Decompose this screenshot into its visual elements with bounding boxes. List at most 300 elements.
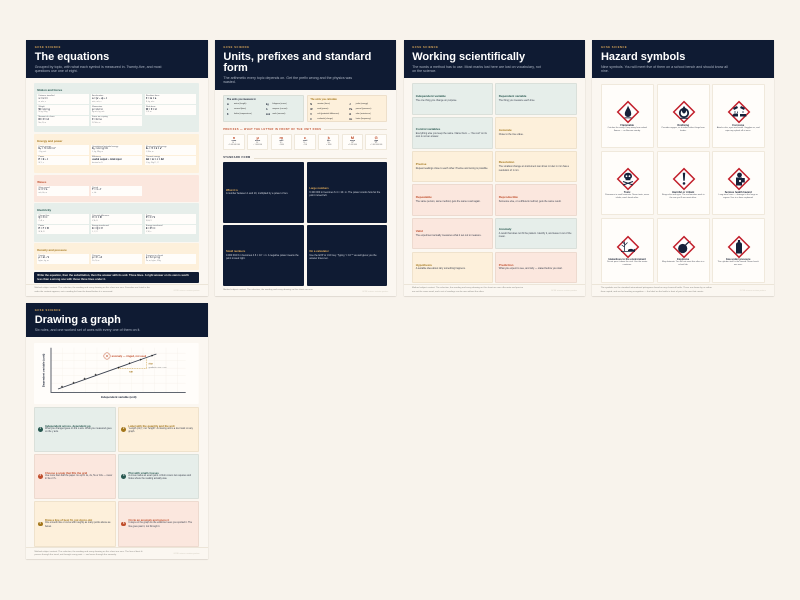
- panel: motion and forces: kg m/s, kg, m/s: [92, 111, 104, 113]
- panel: the units you measure in: mol: [266, 112, 270, 116]
- header: hazard symbols: nine.: [601, 69, 609, 73]
- x axis label: Independent variable (unit): [101, 395, 137, 399]
- panel: waves: Wave speed: [38, 187, 50, 189]
- header: working scientifically: GCSE SCIENCE: [412, 46, 438, 49]
- panel: electricity: E = P × t: [146, 227, 155, 230]
- panel: energy and power: useful output ÷ total input: [92, 158, 122, 161]
- panel: the units you measure in: [223, 95, 304, 122]
- panel: the units you measure in: kelvin (temperature): [234, 112, 252, 114]
- poster: units, prefixes and standard form: [215, 40, 396, 296]
- panel: motion and forces: s = v × t: [38, 97, 47, 100]
- rule 4: 4: [123, 474, 124, 477]
- prefix cards: ÷ 1000: [279, 144, 284, 146]
- panel: waves: Period: [92, 187, 98, 189]
- card: anomaly: Anomaly: [499, 227, 511, 231]
- card: what it is: A number between 1 and 10, multiplied by a power of ten.: [226, 192, 288, 195]
- panel: the units you calculate: W: [310, 108, 313, 110]
- panel: electricity: C, A, s: [38, 220, 44, 222]
- rule 3: [34, 454, 116, 499]
- panel: energy and power: Eₑ = ½ × k × e²: [146, 147, 162, 150]
- hazard card: oxidising: [657, 84, 710, 148]
- panel: the units you calculate: The units you calculate: [310, 98, 337, 101]
- prefix cards: ÷ 1 000 000: [253, 144, 262, 146]
- gradient labels: rise: [149, 363, 154, 366]
- rule 2: “Length (cm)”, not “length”. A missing unit is a lost mark on any graph.: [128, 428, 193, 433]
- prefix cards: giga: [374, 140, 378, 142]
- panel: electricity: Power: [146, 215, 152, 217]
- panel: energy and power: Thermal energy: [146, 156, 160, 158]
- panel: the units you measure in: metre (length): [234, 102, 246, 104]
- footer note: [404, 284, 585, 294]
- y axis label: Dependent variable (unit): [42, 354, 46, 387]
- hazard card: hazardous to the environment: Hazardous to the environment: [609, 258, 646, 261]
- header: hazard symbols: Hazard symbols: [601, 51, 685, 63]
- panel: motion and forces: F = m × a: [146, 97, 156, 100]
- rule 5: [34, 501, 116, 547]
- prefix cards: 10⁻³: [280, 142, 283, 144]
- panel: the units you calculate: hertz (frequency): [356, 118, 371, 120]
- panel: motion and forces: M = F × d: [38, 118, 49, 121]
- panel: energy and power: J, kg, N/kg, m: [92, 151, 103, 153]
- header: units: Units, prefixes and standard: [223, 51, 371, 63]
- chart: worked graph: [34, 343, 198, 404]
- panel: electricity: P = I² × R: [38, 227, 49, 230]
- card: anomaly: A result that does not fit the pattern. Identify it, and leave it out of the mean.: [499, 232, 571, 238]
- panel: electricity: V = I × R: [92, 216, 102, 219]
- poster: hazard symbols: [592, 40, 774, 296]
- hazard card: corrosive: [712, 84, 765, 148]
- card: hypothesis: [412, 252, 493, 283]
- card: on a calculator: On a calculator: [309, 250, 329, 253]
- panel: the units you measure in: K: [227, 112, 229, 116]
- prefix cards: × 1 000 000: [348, 144, 357, 146]
- panel: the units you measure in: mole (amount): [272, 112, 285, 114]
- panel: density and pressure: ρ = m ÷ V: [38, 256, 49, 259]
- panel: density and pressure: [34, 243, 199, 270]
- card: hypothesis: A testable idea about why something happens.: [416, 267, 466, 270]
- panel: motion and forces: N, kg, m/s²: [146, 101, 155, 103]
- hazard card: serious health hazard: Long-term harm — damage to the lungs or organs. Use in a fume cupboard.: [719, 194, 758, 199]
- card: accurate: Accurate: [499, 128, 512, 132]
- rule 1: What you changed goes on the x axis. What you measured goes on the y axis.: [45, 428, 112, 433]
- card: dependent variable: [495, 83, 577, 115]
- footer note: [26, 547, 208, 557]
- panel: waves: Waves: [37, 180, 46, 184]
- panel: the units you calculate: joule (energy): [356, 102, 368, 104]
- panel: electricity: [34, 203, 199, 242]
- card: control variables: Everything else you keep the same. Name them — “the rest” on its own is not an answer.: [416, 132, 487, 138]
- header: the equations: GCSE SCIENCE: [35, 46, 61, 49]
- panel: motion and forces: W = F × d: [146, 108, 156, 111]
- prefix cards: 10⁻²: [303, 142, 307, 144]
- panel: the units you calculate: ohm (resistance): [356, 112, 371, 114]
- panel: electricity: E = Q × V: [92, 227, 103, 230]
- panel: motion and forces: Motion and forces: [37, 88, 62, 92]
- rule 2: [118, 407, 199, 452]
- panel: the units you calculate: Hz: [349, 118, 352, 120]
- panel: energy and power: J, kg, m/s: [38, 151, 46, 153]
- card: resolution: Resolution: [499, 160, 514, 164]
- hazard card: gas under pressure: The cylinder itself is the hazard. Never knock one over.: [718, 261, 759, 266]
- hazard card: explosive: May detonate. You will not meet this often in a school lab.: [662, 261, 704, 266]
- hazard card: corrosive: Attacks skin, eyes and metal. Goggles on, and wipe any splash off at once.: [717, 127, 760, 132]
- rule 1: [34, 407, 116, 452]
- panel: motion and forces: Weight: [38, 106, 45, 108]
- card: reproducible: Someone else, or a different method, gets the same result.: [499, 200, 561, 203]
- panel: motion and forces: Moment of a force: [38, 116, 55, 118]
- prefix cards: ÷ 100: [303, 144, 307, 146]
- gradient labels: run: [129, 371, 134, 374]
- header: working scientifically: on the science.: [412, 69, 436, 73]
- footer note: GCSE science revision posters: [173, 553, 200, 555]
- panel: the units you calculate: C: [310, 118, 312, 120]
- panel: electricity: Potential difference: [92, 215, 109, 217]
- panel: motion and forces: Distance travelled: [38, 95, 54, 97]
- panel: the units you measure in: s: [227, 108, 228, 110]
- prefix cards: micro: [255, 140, 260, 142]
- poster: the equations: [26, 40, 208, 296]
- header: drawing a graph: Six rules, and one worked set of axes with every one of them on it.: [35, 328, 140, 332]
- panel: motion and forces: Nm, N, m: [38, 122, 46, 124]
- card: valid: Valid: [416, 229, 423, 233]
- card: large numbers: 6 400 000 m becomes 6.4 × 10⁶ m. The power counts how far the point moved left.: [309, 191, 380, 197]
- rule 5: 5: [40, 522, 41, 525]
- panel: waves: m/s, Hz, m: [38, 192, 47, 194]
- hazard card: flammable: [601, 84, 654, 148]
- card: on a calculator: [307, 225, 387, 286]
- panel: motion and forces: [34, 83, 199, 132]
- panel: energy and power: Efficiency: [92, 156, 101, 158]
- prefix cards: 10⁻⁶: [256, 142, 259, 144]
- hazard card: flammable: Flammable: [620, 124, 634, 127]
- header: the equations: [26, 40, 208, 78]
- card: small numbers: Small numbers: [226, 250, 245, 253]
- card: large numbers: [307, 162, 387, 223]
- gradient labels: [129, 363, 167, 374]
- panel: density and pressure: Pa, N, m²: [92, 260, 100, 262]
- card: accurate: Close to the true value.: [499, 133, 524, 136]
- panel: density and pressure: Density: [38, 255, 45, 257]
- footer note: GCSE science revision posters: [173, 290, 200, 292]
- panel: energy and power: decimal or %: [92, 162, 103, 164]
- callout: write the equation: [34, 272, 199, 283]
- hazard card: harmful or irritant: Harmful or irritant: [672, 191, 694, 194]
- prefix cards: × 1000: [326, 144, 331, 146]
- hazard card: explosive: Explosive: [677, 258, 689, 261]
- header: units: form: [223, 62, 248, 74]
- footer note: GCSE science revision posters: [362, 291, 388, 293]
- prefix cards: 10⁻⁹: [232, 142, 236, 144]
- prefix cards: [223, 134, 387, 150]
- card: reproducible: Reproducible: [499, 195, 518, 199]
- card: reproducible: [495, 184, 577, 216]
- hazard card: serious health hazard: Serious health hazard: [725, 191, 752, 194]
- panel: waves: v = f × λ: [38, 188, 47, 191]
- rule 2: 2: [123, 427, 124, 430]
- header: hazard symbols: Nine symbols. You will meet five of them on a school bench and should know all: [601, 64, 728, 68]
- anomaly marker: anomaly — ringed, not used: [112, 354, 147, 358]
- panel: density and pressure: Density and pressure: [37, 248, 67, 252]
- panel: electricity: W, A, V: [146, 220, 152, 222]
- card: on a calculator: Use the EXP or ×10ˣ key. Typing “× 10 ^” as well gives you the answer times ten.: [309, 254, 377, 260]
- prefix cards: m: [280, 135, 283, 140]
- panel: the units you calculate: Ω: [349, 112, 351, 116]
- prefix cards: k: [328, 135, 330, 140]
- callout: write the equation: Write the equation, then the substitution, then the answer with its unit. Three lines. A right answer on its own is worth: [37, 274, 189, 277]
- rule 2: Label with the quantity and the unit: [128, 425, 175, 428]
- card: prediction: What you expect to see, and why — stated before you start.: [499, 267, 563, 270]
- panel: waves: s, Hz: [92, 192, 96, 194]
- rule 6: [118, 501, 199, 547]
- card: dependent variable: The thing you measure each time.: [499, 99, 535, 102]
- rule 5: Draw a line of best fit, not dot-to-dot: [45, 519, 92, 522]
- prefix cards: G: [375, 135, 378, 140]
- hazard card: harmful or irritant: [657, 151, 710, 215]
- footer note: Method subject content. The selection, the wording and every drawing on this sheet are ours. The line of best fit: [34, 551, 142, 553]
- prefix cards: × 1 000 000 000: [370, 144, 382, 146]
- panel: energy and power: Eₖ = ½ × m × v²: [38, 147, 56, 150]
- card: control variables: Control variables: [416, 127, 440, 131]
- card: repeatable: [412, 184, 493, 216]
- panel: energy and power: W, J, s: [38, 162, 44, 164]
- rule 4: Plot with small crosses: [128, 472, 159, 475]
- panel: energy and power: Energy and power: [37, 139, 62, 143]
- prefix cards: µ: [256, 135, 259, 140]
- prefix cards: centi: [303, 140, 307, 142]
- panel: motion and forces: W = m × g: [38, 108, 50, 111]
- hazard card: explosive: [657, 218, 710, 283]
- panel: the units you measure in: kg: [266, 102, 269, 106]
- card: large numbers: Large numbers: [309, 187, 329, 190]
- header: working scientifically: The words a method has to use. Most marks lost here are lost on vocabulary, not: [412, 64, 541, 68]
- panel: the units you calculate: Pa: [349, 108, 352, 110]
- panel: electricity: Energy transferred: [146, 225, 162, 227]
- hazard card: gas under pressure: [712, 218, 765, 283]
- panel: electricity: Energy transferred: [92, 225, 109, 227]
- card: prediction: [495, 252, 577, 283]
- prefix cards: mega: [350, 140, 355, 142]
- card: prediction: Prediction: [499, 263, 513, 267]
- panel: motion and forces: Force on a spring: [92, 116, 108, 118]
- panel: the units you measure in: kilogram (mass): [272, 102, 287, 104]
- rule 3: 3: [40, 474, 41, 477]
- header: the equations: questions use one of eight.: [35, 69, 78, 73]
- rule 4: [118, 454, 199, 499]
- footer note: GCSE science revision posters: [551, 290, 577, 292]
- card: hypothesis: Hypothesis: [416, 263, 432, 267]
- prefix cards: 10⁹: [375, 142, 377, 144]
- panel: energy and power: Eₚ = m × g × h: [92, 147, 108, 150]
- footer note: GCSE science revision posters: [740, 290, 766, 292]
- panel: density and pressure: Pressure: [92, 255, 100, 257]
- panel: waves: T = 1 ÷ f: [92, 188, 101, 191]
- card: precise: Repeat readings close to each other. Precise and wrong is possible.: [416, 167, 488, 170]
- rule 6: Circle an anomaly and ignore it: [128, 519, 169, 522]
- prefix cards: c: [304, 135, 306, 140]
- card: dependent variable: Dependent variable: [499, 94, 526, 98]
- callout: write the equation: less than a wrong one with those three lines under it.: [37, 278, 106, 281]
- panel: motion and forces: Resultant force: [146, 95, 159, 97]
- heading: prefixes: PREFIXES — WHAT THE LETTER IN FRONT OF THE UNIT DOES: [223, 128, 321, 130]
- header: drawing a graph: GCSE SCIENCE: [35, 309, 61, 312]
- panel: density and pressure: Pa, m, kg/m³, N/kg: [146, 260, 161, 262]
- panel: the units you measure in: m: [227, 102, 229, 106]
- heading: standard form: STANDARD FORM: [223, 156, 251, 159]
- rule 3: Choose a scale that fills the grid: [45, 472, 87, 475]
- prefix cards: milli: [279, 140, 283, 142]
- panel: motion and forces: N, kg, N/kg: [38, 111, 47, 113]
- card: repeatable: The same person, same method, gets the same result again.: [416, 200, 481, 203]
- panel: the units you measure in: The units you measure in: [227, 98, 256, 101]
- panel: motion and forces: m/s², m/s, s: [92, 101, 101, 103]
- panel: the units you calculate: J: [349, 102, 351, 106]
- header: hazard symbols: GCSE SCIENCE: [601, 46, 627, 49]
- card: small numbers: 0.000 004 6 m becomes 4.6 × 10⁻⁶ m. A negative power means the point moved right.: [226, 254, 299, 260]
- poster: working scientifically: [404, 40, 585, 296]
- panel: the units you measure in: ampere (current): [272, 108, 287, 110]
- header: hazard symbols: [592, 40, 774, 78]
- footer note: [592, 284, 774, 294]
- rule 4: A cross marks an exact point. A blob covers two squares and hides where the reading actually was.: [128, 475, 191, 480]
- header: units: [215, 40, 396, 90]
- hazard card: flammable: Catches fire easily. Keep away from naked flames — no Bunsen nearby.: [608, 127, 647, 132]
- panel: motion and forces: F = k × e: [92, 118, 102, 121]
- card: what it is: [223, 162, 304, 223]
- rule 6: It stays on the graph so the examiner sees you spotted it. The line goes past it, not through it.: [128, 522, 192, 528]
- footer note: than copied, and are for learning recognition — the label on the bottle in front of you is the one that counts.: [601, 291, 704, 293]
- panel: motion and forces: m, m/s, s: [38, 101, 46, 103]
- hazard card: hazardous to the environment: [601, 218, 654, 283]
- hazard card: hazardous to the environment: Do not pour it down the sink. Use the waste container.: [607, 261, 647, 266]
- footer note: The symbols are the standard international pictograms found on any chemical bottle. These are drawn by us rather: [601, 287, 712, 289]
- panel: electricity: Electricity: [37, 208, 51, 212]
- card: anomaly: [495, 218, 577, 249]
- panel: motion and forces: a = (v − u) ÷ t: [92, 97, 107, 100]
- panel: the units you calculate: watt (power): [317, 108, 328, 110]
- card: accurate: [495, 117, 577, 149]
- card: repeatable: Repeatable: [416, 195, 432, 199]
- panel: energy and power: J, N/m, m: [146, 151, 154, 153]
- hazard card: toxic: Toxic: [624, 191, 630, 194]
- hazard card: harmful or irritant: Stings skin and eyes. The exclamation mark is the one you’ll see most often.: [662, 194, 705, 199]
- panel: energy and power: [34, 134, 199, 173]
- rule 3: Use more than half the paper. Go up in 1s, 2s, 5s or 10s — never in 3s or 7s.: [45, 475, 112, 480]
- panel: motion and forces: Acceleration: [92, 95, 103, 97]
- panel: electricity: W, A, Ω: [38, 231, 45, 233]
- footer note: Method subject content. The selection, the wording and every drawing on this sheet are ours. Accurate and precise: [412, 287, 523, 289]
- panel: energy and power: Kinetic energy: [38, 146, 51, 148]
- card: independent variable: The one thing you change on purpose.: [416, 99, 457, 102]
- panel: electricity: Power: [38, 225, 44, 227]
- panel: the units you calculate: V: [310, 112, 312, 116]
- rule 6: 6: [123, 522, 124, 525]
- panel: electricity: J, W, s: [146, 231, 151, 233]
- card: what it is: What it is: [226, 189, 238, 192]
- hazard card: toxic: [601, 151, 654, 215]
- panel: energy and power: J, kg, J/kg°C, °C: [146, 162, 159, 164]
- panel: the units you calculate: [307, 95, 387, 122]
- rule 1: Independent across, dependent up: [45, 425, 91, 428]
- header: drawing a graph: [26, 303, 208, 337]
- hazard card: oxidising: Oxidising: [677, 124, 689, 127]
- footer note: [26, 284, 208, 294]
- panel: the units you calculate: coulomb (charge): [317, 118, 333, 120]
- card: valid: [412, 218, 493, 249]
- panel: motion and forces: p = m × v: [92, 108, 103, 111]
- panel: the units you measure in: second (time): [234, 108, 246, 110]
- anomaly marker: [104, 353, 147, 359]
- header: units: GCSE SCIENCE: [223, 46, 250, 49]
- card: independent variable: [412, 83, 493, 115]
- prefix cards: ÷ 1 000 000 000: [228, 144, 240, 146]
- hazard card: gas under pressure: Gas under pressure: [726, 258, 750, 261]
- panel: energy and power: P = E ÷ t: [38, 158, 48, 161]
- panel: the units you calculate: newton (force): [317, 102, 330, 104]
- footer note: passes through the trend, not through every point — and never through the anomaly.: [34, 554, 116, 556]
- panel: motion and forces: J, N, m: [146, 111, 152, 113]
- panel: density and pressure: p = F ÷ A: [92, 256, 102, 259]
- footer note: order the content appears, not a reading list from the board before it is assessed.: [34, 291, 113, 293]
- panel: energy and power: Power: [38, 156, 44, 158]
- prefix cards: nano: [232, 140, 236, 142]
- panel: electricity: V, A, Ω: [92, 220, 98, 222]
- panel: the units you calculate: pascal (pressure): [356, 108, 371, 110]
- panel: the units you measure in: A: [266, 108, 268, 110]
- prefix cards: kilo: [327, 140, 330, 142]
- card: valid: The experiment actually measures what it set out to measure.: [416, 234, 481, 237]
- footer note: Method subject content. The selection, the wording and every drawing on this sheet are ours.: [223, 289, 313, 291]
- card: independent variable: Independent variable: [416, 94, 446, 98]
- prefix cards: 10³: [328, 142, 330, 144]
- header: working scientifically: [404, 40, 585, 78]
- header: drawing a graph: Drawing a graph: [35, 314, 121, 326]
- panel: motion and forces: N, N/m, m: [92, 122, 100, 124]
- prefix cards: M: [351, 135, 354, 140]
- header: the equations: Grouped by topic, with what each symbol is measured in. Twenty-five, and most: [35, 64, 161, 68]
- hazard card: serious health hazard: [712, 151, 765, 215]
- rule 1: 1: [40, 427, 41, 430]
- panel: density and pressure: kg/m³, kg, m³: [38, 260, 49, 262]
- panel: electricity: P = I × V: [146, 216, 155, 219]
- footer note: Method subject content. The selection, the wording and every drawing on this sheet are ours. Formulae are listed in the: [34, 287, 150, 289]
- panel: density and pressure: p = h × ρ × g: [146, 256, 160, 259]
- card: precise: Precise: [416, 162, 426, 166]
- card: small numbers: [223, 225, 304, 286]
- gradient labels: gradient = rise ÷ run: [149, 366, 167, 369]
- footer note: are not the same word, and a set of readings can be one without the other.: [412, 291, 484, 293]
- poster: drawing a graph: [26, 303, 208, 559]
- panel: energy and power: ΔE = m × c × Δθ: [146, 158, 164, 161]
- hazard card: corrosive: Corrosive: [732, 124, 744, 127]
- panel: energy and power: Elastic potential energy: [146, 146, 167, 148]
- card: resolution: [495, 151, 577, 182]
- panel: electricity: Q = I × t: [38, 216, 47, 219]
- card: control variables: [412, 117, 493, 149]
- panel: energy and power: Gravitational potential energy: [92, 146, 118, 148]
- hazard card: toxic: Poisonous in small amounts. Never taste, never inhale, wash hands after.: [605, 194, 649, 199]
- prefix cards: 10⁶: [351, 142, 354, 144]
- panel: motion and forces: Momentum: [92, 106, 102, 108]
- card: precise: [412, 151, 493, 182]
- footer note: [223, 288, 388, 293]
- panel: motion and forces: Work done: [146, 106, 156, 108]
- header: units: The arithmetic every topic depends on. Get the prefix wrong and the physics was: [223, 76, 352, 80]
- panel: the units you calculate: volt (potential difference): [317, 112, 339, 114]
- panel: waves: [34, 175, 199, 202]
- header: the equations: The equations: [35, 51, 109, 63]
- header: working scientifically: Working scientifically: [412, 51, 525, 63]
- header: units: wasted.: [223, 80, 236, 84]
